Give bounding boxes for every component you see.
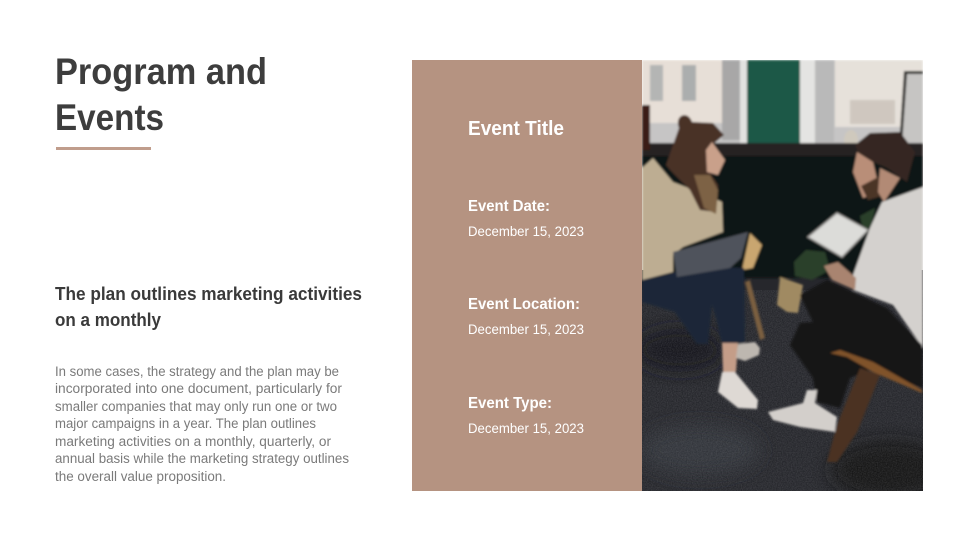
body text: major campaigns in a year. The plan outlines	[55, 416, 316, 431]
event location	[468, 296, 584, 337]
event title: Event Title	[468, 118, 564, 140]
dark sill and radiator	[642, 143, 923, 156]
body text: annual basis while the marketing strategy outlines	[55, 451, 349, 466]
basket and plant	[777, 277, 803, 313]
panel: event details	[412, 60, 642, 491]
body text: smaller companies that may only run one or two	[55, 399, 337, 414]
event location: Event Location:	[468, 296, 580, 313]
title: Events	[55, 97, 164, 138]
green column	[747, 60, 800, 144]
man's hair and face	[853, 152, 880, 198]
title	[55, 51, 267, 138]
man's trousers	[790, 280, 922, 408]
event date: December 15, 2023	[468, 224, 584, 239]
body text	[55, 364, 349, 484]
man's shirt	[853, 187, 923, 348]
event date: Event Date:	[468, 198, 550, 215]
rug texture	[642, 290, 923, 491]
man's chair	[830, 350, 922, 393]
woman's hair and face	[666, 115, 724, 212]
man's arm	[824, 262, 856, 290]
tablet	[808, 213, 868, 257]
woman's ankle	[722, 343, 738, 372]
event location: December 15, 2023	[468, 322, 584, 337]
event type	[468, 395, 584, 436]
body text: marketing activities on a monthly, quarterly, or	[55, 434, 331, 449]
body text: the overall value proposition.	[55, 469, 226, 484]
woman's shoes	[736, 342, 760, 361]
title underline	[56, 147, 151, 150]
wall and windows	[642, 60, 923, 145]
subheading: on a monthly	[55, 310, 161, 330]
woman's sweater	[642, 158, 723, 280]
laptop	[673, 232, 748, 277]
woman's chair	[742, 233, 762, 270]
rug	[642, 270, 923, 491]
event type: December 15, 2023	[468, 421, 584, 436]
event date	[468, 198, 584, 239]
event type: Event Type:	[468, 395, 552, 412]
subheading	[55, 284, 362, 330]
title: Program and	[55, 51, 267, 92]
man's shoe	[768, 390, 837, 432]
photo: two people talking	[642, 60, 923, 491]
subheading: The plan outlines marketing activities	[55, 284, 362, 304]
woman's jeans	[642, 266, 745, 344]
body text: In some cases, the strategy and the plan may be	[55, 364, 339, 379]
body text: incorporated into one document, particularly for	[55, 381, 343, 396]
